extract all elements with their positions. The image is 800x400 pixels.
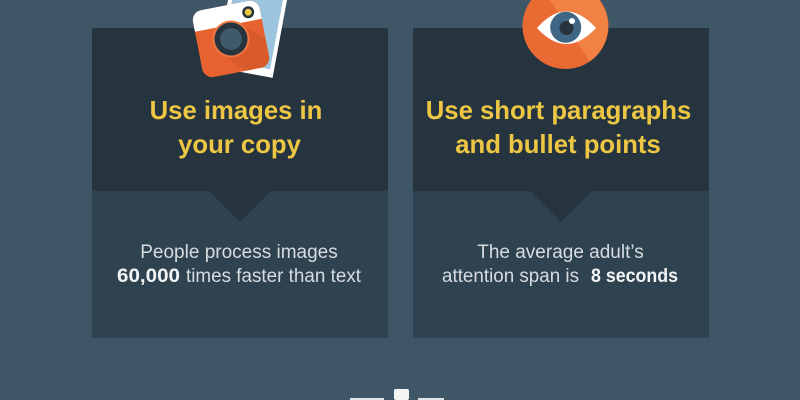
- camera body: [191, 0, 271, 79]
- body text: attention span: The average adult’s: [477, 242, 644, 263]
- heading: use images: Use images in: [150, 97, 322, 125]
- panel header background: [92, 28, 388, 191]
- panel: short paragraphs: [413, 28, 709, 338]
- panel body background: [92, 191, 388, 338]
- icon: camera and photo: [191, 0, 289, 79]
- heading: short paragraphs: Use short paragraphs: [426, 97, 691, 125]
- body text: images: People process images: [140, 242, 338, 263]
- pointer triangle: [530, 191, 592, 222]
- panel body background: [413, 191, 709, 338]
- body text: attention span: attention span is: [442, 266, 579, 287]
- heading: use images: your copy: [178, 131, 302, 159]
- photo behind camera: [216, 0, 289, 78]
- icon: eye in orange circle: [522, 0, 608, 69]
- body text: attention span: 8 seconds: [591, 266, 678, 287]
- panel header background: [413, 28, 709, 191]
- pointer triangle: [209, 191, 271, 222]
- body text: attention span: [442, 242, 678, 287]
- body text: images: times faster than text: [186, 266, 362, 287]
- panel: use images: [92, 28, 388, 338]
- body text: images: [117, 242, 362, 287]
- body text: images: 60,000: [117, 266, 180, 287]
- heading: short paragraphs: and bullet points: [455, 131, 661, 159]
- icon: partial white shape at bottom: [350, 389, 444, 400]
